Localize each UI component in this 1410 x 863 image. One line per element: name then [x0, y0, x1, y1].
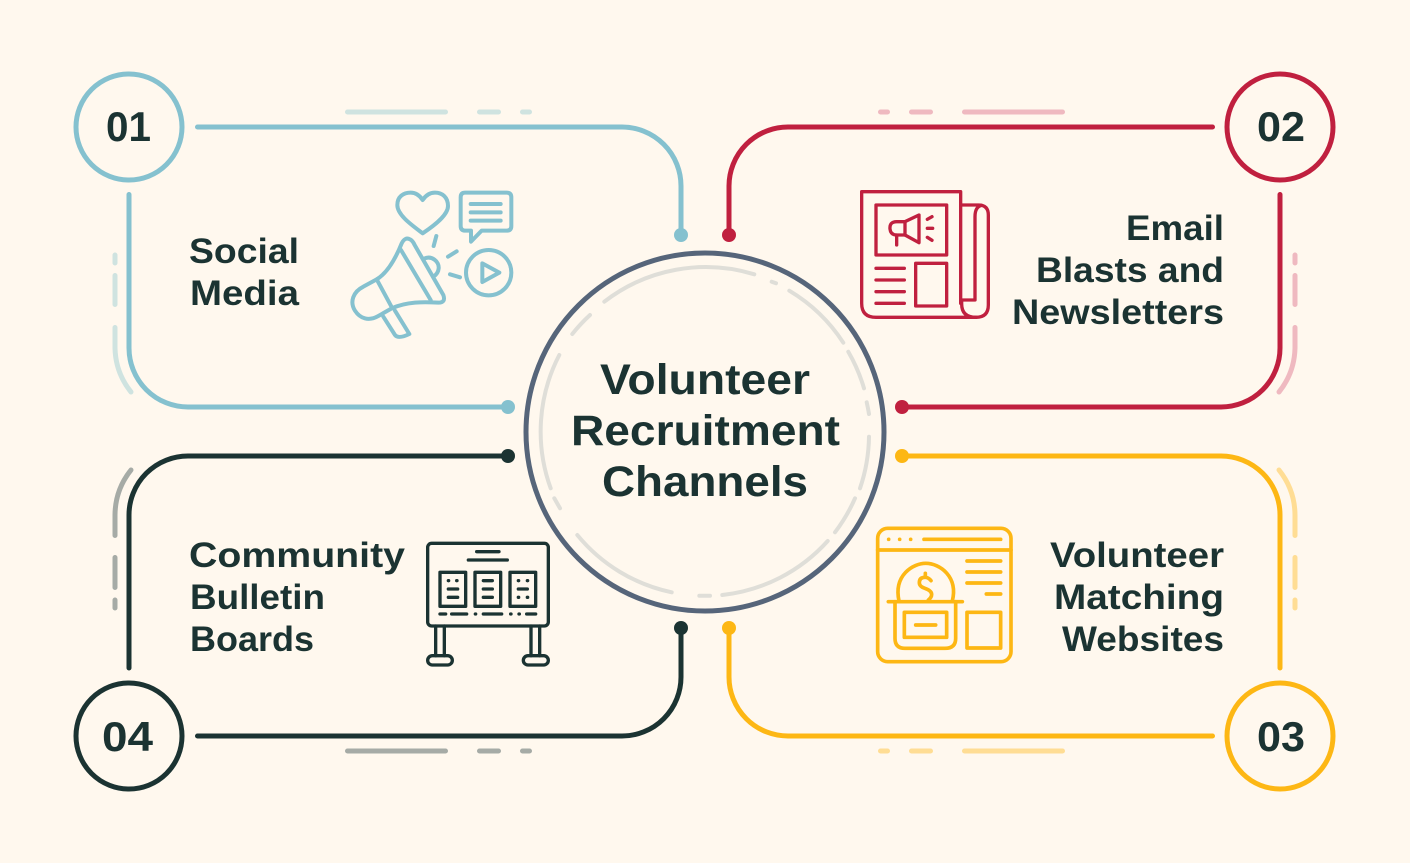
icon: fundraising website: [878, 528, 1011, 662]
title: [571, 356, 840, 506]
label: volunteer matching websites: [1050, 536, 1224, 659]
title: Volunteer: [600, 356, 810, 404]
label: social media: Media: [190, 274, 300, 313]
hub dashed inner ring: [541, 267, 869, 596]
number badge 03: 03: [1257, 713, 1305, 760]
panel: 01 social media: [76, 74, 688, 414]
title: Recruitment: [571, 407, 840, 455]
label: email blasts and newsletters: Email: [1126, 209, 1224, 248]
number badge 04: [76, 683, 182, 789]
number badge 01: [76, 74, 182, 180]
connector lines 04: [129, 449, 688, 736]
label: community bulletin boards: [189, 536, 406, 659]
label: volunteer matching websites: Matching: [1054, 578, 1224, 617]
label: email blasts and newsletters: Newsletters: [1012, 293, 1224, 332]
central hub: [526, 253, 884, 611]
label: community bulletin boards: Community: [189, 536, 406, 575]
label: volunteer matching websites: Volunteer: [1050, 536, 1224, 575]
label: social media: Social: [189, 232, 299, 271]
connector lines 01: [129, 127, 688, 414]
number badge 03: [1227, 683, 1333, 789]
label: email blasts and newsletters: [1012, 209, 1224, 332]
hub ring: [526, 253, 884, 611]
panel: 04 community bulletin boards: [76, 449, 688, 789]
label: social media: [189, 232, 300, 313]
panel: 03 volunteer matching websites: [722, 449, 1333, 789]
number badge 04: 04: [102, 713, 154, 760]
label: volunteer matching websites: Websites: [1062, 620, 1224, 659]
title: Channels: [602, 458, 808, 506]
number badge 02: [1227, 74, 1333, 180]
connector lines 02: [722, 127, 1280, 414]
panel: 02 email blasts and newsletters: [722, 74, 1333, 414]
icon: megaphone with heart, chat and play: [352, 193, 511, 337]
label: community bulletin boards: Bulletin: [190, 578, 325, 617]
icon: newspaper with megaphone: [862, 192, 988, 317]
label: community bulletin boards: Boards: [190, 620, 314, 659]
icon: bulletin board: [428, 543, 548, 665]
connector lines 03: [722, 449, 1280, 736]
number badge 01: 01: [106, 103, 151, 150]
label: email blasts and newsletters: Blasts and: [1036, 251, 1224, 290]
number badge 02: 02: [1257, 103, 1305, 150]
